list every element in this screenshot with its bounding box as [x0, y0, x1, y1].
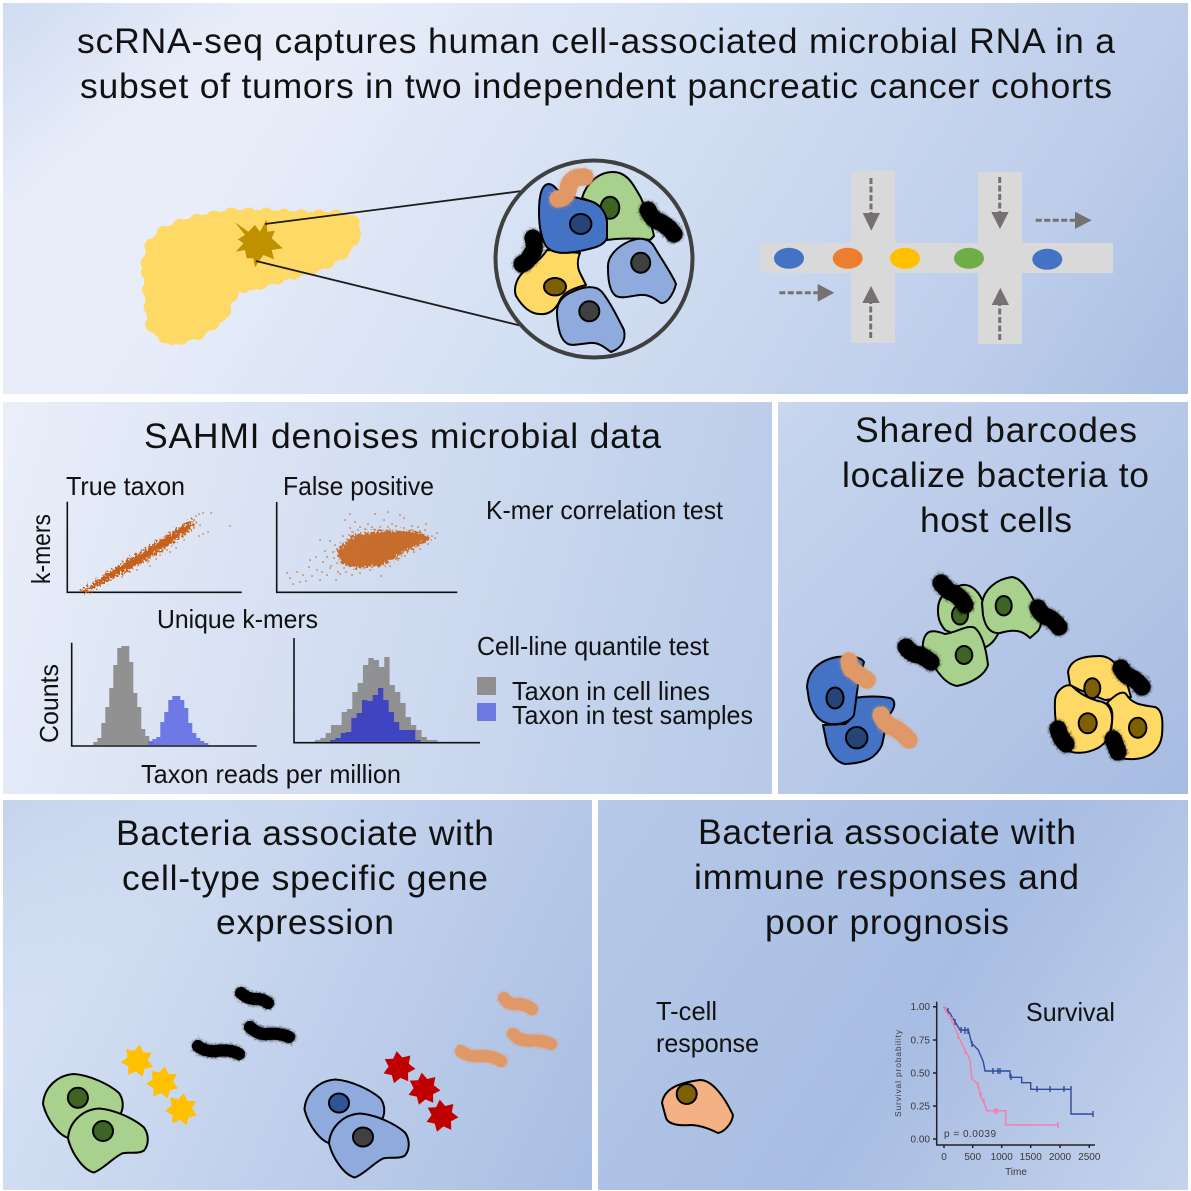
tumor microenvironment cell circle: [496, 160, 692, 358]
light blue cell lower: [557, 287, 624, 352]
y tick labels: 0.50: [911, 1068, 930, 1080]
heading: SAHMI denoises microbial data: [144, 416, 661, 456]
orange bacteria: [461, 998, 551, 1061]
y tick labels: [911, 1002, 930, 1146]
axis label: counts: Counts: [34, 664, 64, 743]
x tick labels: 1500: [1020, 1152, 1042, 1163]
green cell cluster with black bacteria: [906, 577, 1059, 686]
y tick labels: 0.25: [911, 1102, 930, 1112]
yellow cell: [515, 250, 586, 314]
panel: scRNA-seq overview: [3, 3, 1188, 394]
heading: Shared barcodes: [855, 410, 1137, 450]
title: scRNA-seq captures human cell-associated microbial RNA in a: [77, 21, 1115, 61]
heading: host cells: [920, 500, 1072, 540]
p value: p = 0.0039: [944, 1129, 996, 1140]
label: T-cell response: response: [656, 1028, 759, 1058]
label: cell-line quantile test: Cell-line quantile test: [477, 631, 710, 661]
y tick labels: 0.75: [911, 1036, 930, 1046]
x tick labels: 1000: [991, 1152, 1013, 1163]
yellow cell cluster with black bacteria: [1055, 656, 1162, 759]
scatter plot: true taxon: [67, 502, 242, 593]
light blue cell right: [608, 239, 676, 303]
y tick labels: 0.00: [911, 1134, 930, 1146]
heading: [116, 813, 494, 942]
heading: [842, 410, 1149, 540]
x tick labels: [941, 1152, 1101, 1163]
panel: SAHMI denoising: [3, 402, 772, 794]
microfluidic channel: [760, 171, 1113, 344]
label: survival: Survival: [1026, 997, 1115, 1027]
x axis title: Time: [1005, 1167, 1027, 1178]
heading: poor prognosis: [765, 902, 1009, 942]
x tick labels: 500: [964, 1152, 981, 1163]
droplets: [774, 248, 1062, 270]
label: k-mer correlation test: K-mer correlation test: [486, 495, 724, 525]
legend: taxon in cell lines: Taxon in cell lines: [512, 676, 710, 706]
blue cell: [539, 184, 607, 253]
red stars: [381, 1049, 460, 1133]
green cell: [582, 172, 654, 240]
y axis title: Survival probability: [893, 1029, 903, 1117]
scatter plot: false positive: [277, 502, 457, 592]
blue cell pair: [304, 1080, 409, 1178]
green cell pair: [43, 1074, 148, 1172]
heading: Bacteria associate with: [698, 812, 1076, 852]
yellow stars: [119, 1042, 200, 1126]
black bacteria: [198, 993, 289, 1054]
legend: taxon in test samples: Taxon in test samples: [512, 700, 753, 730]
title: subset of tumors in two independent pancreatic cancer cohorts: [80, 66, 1112, 106]
axis label: k-mers: k-mers: [26, 514, 56, 584]
bacterium: black left: [522, 238, 534, 264]
heading: [694, 812, 1079, 942]
heading: cell-type specific gene: [122, 858, 488, 898]
title: [77, 21, 1115, 106]
label: false positive: False positive: [283, 471, 434, 501]
curve: pink group: [943, 1007, 1058, 1128]
panel: immune responses and prognosis: [598, 800, 1188, 1190]
axes: [933, 1002, 1095, 1148]
heading: Bacteria associate with: [116, 813, 494, 853]
heading: localize bacteria to: [842, 455, 1149, 495]
x tick labels: 2000: [1049, 1152, 1072, 1163]
panel: cell-type specific gene expression: [3, 800, 592, 1190]
icon: T cell: [662, 1080, 733, 1133]
flow arrows: [779, 177, 1092, 340]
x tick labels: 0: [941, 1152, 947, 1163]
blue cell pair with orange bacteria: [807, 657, 909, 764]
y tick labels: 1.00: [911, 1002, 930, 1013]
zoom lines from tumor to cell circle: [256, 191, 522, 326]
icon: pancreas with tumor: [148, 215, 356, 340]
heading: expression: [216, 902, 394, 942]
heading: immune responses and: [694, 857, 1079, 897]
label: T-cell response: [656, 996, 759, 1058]
bacterium: black right: [648, 210, 674, 234]
axis label: unique k-mers: Unique k-mers: [157, 604, 318, 634]
x tick labels: 2500: [1078, 1152, 1101, 1163]
Kaplan-Meier survival chart: [893, 1002, 1101, 1178]
histogram: true taxon: [72, 643, 257, 746]
curve: blue group: [943, 1007, 1093, 1117]
label: true taxon: True taxon: [66, 471, 185, 501]
panel: shared barcodes: [778, 402, 1188, 794]
histogram: false positive: [294, 638, 480, 743]
axis label: taxon reads per million: Taxon reads per million: [141, 759, 401, 789]
bacterium: orange: [558, 177, 585, 199]
label: T-cell response: T-cell: [656, 996, 717, 1026]
